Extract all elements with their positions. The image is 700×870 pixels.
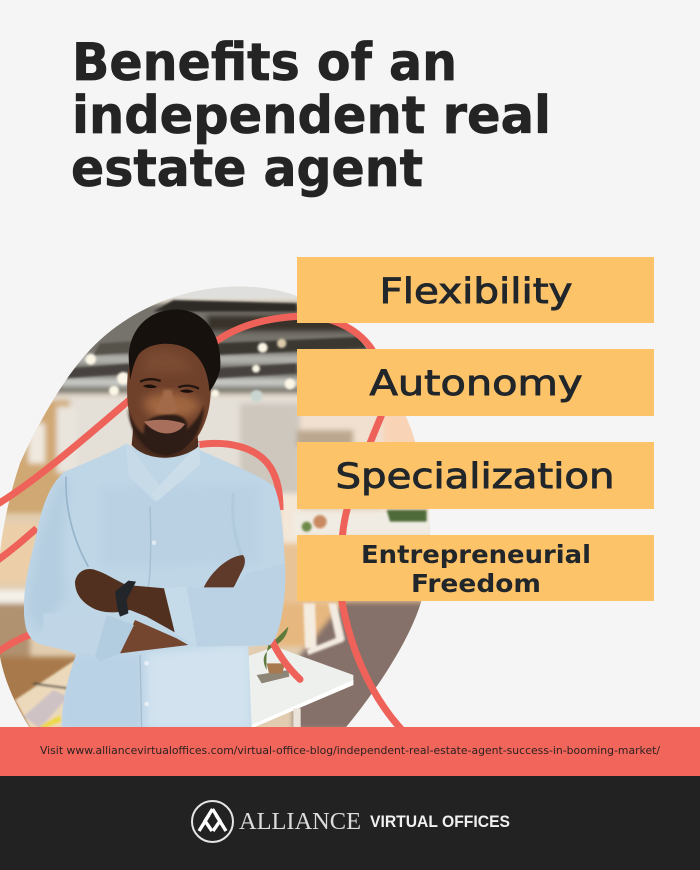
shirt torso xyxy=(24,443,285,728)
benefit: Autonomy xyxy=(297,349,654,416)
shelves, plants and desk items xyxy=(15,510,427,728)
beard stubble xyxy=(127,405,204,457)
watch xyxy=(115,581,136,617)
office photo with agent xyxy=(0,280,440,733)
viewer-right cuff xyxy=(164,587,197,645)
office background xyxy=(0,280,440,733)
collar xyxy=(126,443,163,502)
benefit: Specialization xyxy=(297,442,654,509)
eyes and brows xyxy=(140,379,199,389)
viewer-left sleeve lower edge xyxy=(43,613,107,656)
agent xyxy=(24,309,285,728)
lower forearm xyxy=(120,620,188,653)
face light xyxy=(143,393,200,419)
benefit: Entrepreneurial Freedom xyxy=(297,535,654,601)
head xyxy=(127,340,211,457)
shirt shading xyxy=(27,477,260,728)
upper forearm and fist xyxy=(75,569,177,633)
ceiling lights xyxy=(85,339,295,402)
title xyxy=(71,33,551,199)
title: estate agent xyxy=(71,139,423,199)
title: independent real xyxy=(72,86,551,146)
viewer-left cuff xyxy=(93,615,134,662)
smile xyxy=(144,420,185,433)
hair xyxy=(129,309,220,392)
white desk xyxy=(247,647,353,728)
footer link band: Visit www.alliancevirtualoffices.com/virtual-office-blog/independent-real-estate-agent-success-in-booming-market/ xyxy=(40,744,660,757)
benefit: Flexibility: Flexibility xyxy=(380,272,572,312)
footer link band xyxy=(0,727,700,776)
benefit: Specialization: Specialization xyxy=(336,457,614,497)
placket and buttons xyxy=(140,507,156,728)
benefit: Autonomy: Autonomy xyxy=(370,364,582,404)
icon: alliance logo mark xyxy=(192,801,233,842)
viewer-right sleeve xyxy=(187,563,285,647)
neck xyxy=(132,420,198,458)
logo wordmark: ALLIANCE xyxy=(239,809,361,835)
benefit: Entrepreneurial Freedom: Entrepreneurial xyxy=(361,540,591,569)
title: Benefits of an xyxy=(72,33,457,93)
nose xyxy=(156,390,178,414)
coral curve lines xyxy=(0,316,405,733)
hand behind sleeve xyxy=(203,555,245,588)
ceiling beams xyxy=(63,300,367,378)
benefit: Entrepreneurial Freedom: Freedom xyxy=(411,569,541,598)
benefit: Flexibility xyxy=(297,257,654,323)
footer logo band xyxy=(0,776,700,870)
footer logo band: VIRTUAL OFFICES xyxy=(370,812,510,831)
